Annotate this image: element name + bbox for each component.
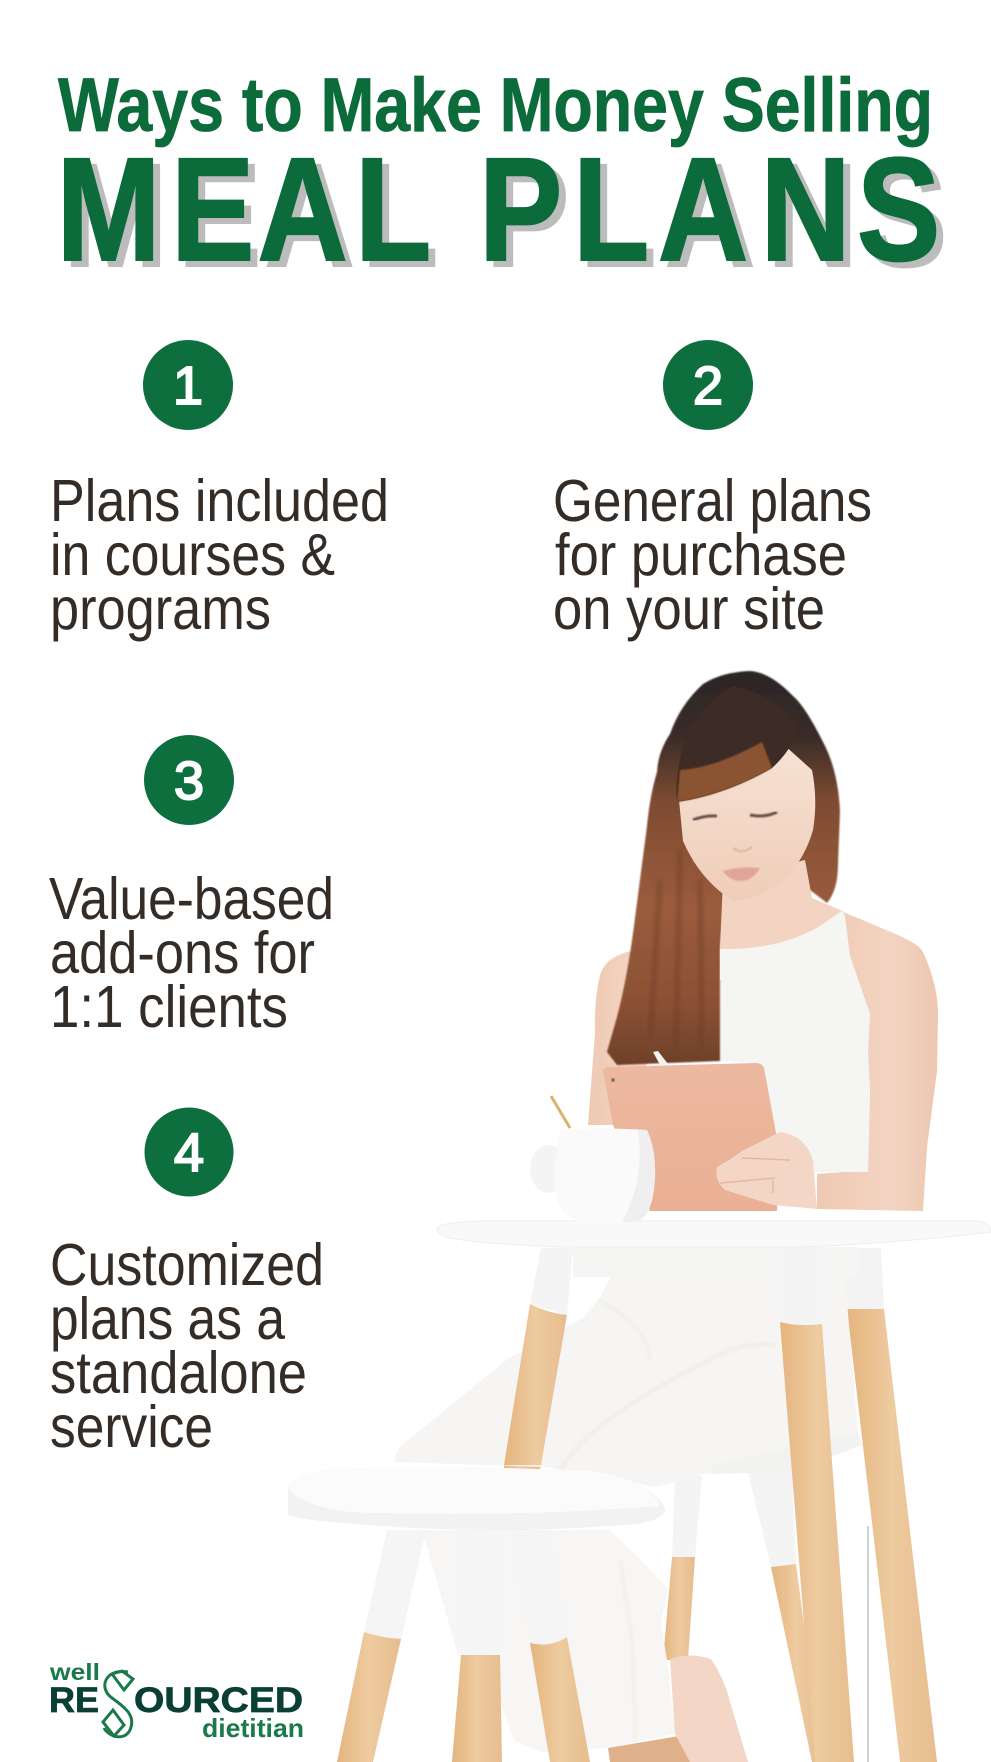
title line 2: meal plans: MEAL PLANS bbox=[57, 127, 940, 291]
trousers upper bbox=[394, 1277, 858, 1487]
text 1: in courses & bbox=[50, 522, 335, 588]
hand bbox=[716, 1132, 817, 1209]
logo: well resourced dietitian: OURCED bbox=[134, 1681, 303, 1720]
badge 3: 3 bbox=[174, 751, 204, 811]
dress bbox=[720, 910, 870, 1172]
badge 2 bbox=[663, 340, 753, 430]
logo: well resourced dietitian bbox=[49, 1659, 304, 1743]
woman upper body bbox=[588, 671, 938, 1211]
text 4: standalone bbox=[50, 1340, 307, 1406]
text 1: programs bbox=[50, 576, 271, 642]
foot bbox=[670, 1656, 748, 1762]
text 2 bbox=[553, 468, 872, 642]
centre table leg bbox=[778, 1249, 854, 1762]
text 3 bbox=[49, 866, 334, 1040]
chair seat bbox=[711, 1433, 862, 1474]
badge 1: 1 bbox=[173, 356, 203, 416]
logo: well resourced dietitian: well bbox=[49, 1659, 100, 1685]
icon: money S bbox=[103, 1671, 133, 1737]
table apron bbox=[573, 1247, 858, 1277]
step 4 bbox=[50, 1108, 324, 1460]
stylus bbox=[653, 1051, 668, 1065]
neck and chest bbox=[720, 860, 845, 950]
hair bbox=[607, 671, 840, 1065]
step 2 bbox=[553, 340, 872, 642]
step 3 bbox=[49, 735, 334, 1040]
face bbox=[676, 686, 815, 901]
thin vertical line bbox=[867, 1526, 869, 1762]
step 1 bbox=[50, 340, 389, 642]
rear table leg bbox=[842, 1248, 937, 1762]
text 4: Customized bbox=[50, 1232, 324, 1298]
badge 1 bbox=[143, 340, 233, 430]
text 2: General plans bbox=[553, 468, 872, 534]
badge 3 bbox=[144, 735, 234, 825]
text 2: for purchase bbox=[555, 522, 847, 588]
bangs bbox=[676, 686, 800, 802]
fingers and ring bbox=[720, 1158, 790, 1193]
stool seat bbox=[288, 1467, 665, 1530]
foot far bbox=[608, 1736, 690, 1762]
text 3: add-ons for bbox=[50, 920, 315, 986]
stool legs bbox=[337, 1530, 590, 1762]
text 4: service bbox=[50, 1394, 213, 1460]
photo: woman with tablet at table bbox=[288, 671, 991, 1762]
left table leg in front of thigh bbox=[504, 1304, 567, 1465]
cup with straw bbox=[530, 1096, 655, 1222]
logo: well resourced dietitian: RE bbox=[49, 1681, 99, 1720]
dress strap overlay bbox=[720, 910, 845, 980]
nose shadow bbox=[733, 847, 752, 851]
left arm bbox=[588, 950, 660, 1125]
logo: well resourced dietitian: dietitian bbox=[202, 1713, 304, 1743]
text 3: 1:1 clients bbox=[50, 974, 288, 1040]
text 1: Plans included bbox=[50, 468, 389, 534]
title line 2: meal plans: MEAL PLANS bbox=[64, 133, 947, 297]
text 1 bbox=[50, 468, 389, 642]
table top bbox=[437, 1221, 991, 1247]
left table leg lower bbox=[498, 1248, 573, 1660]
text 4: plans as a bbox=[50, 1286, 285, 1352]
badge 4 bbox=[144, 1108, 234, 1196]
badge 4: 4 bbox=[174, 1123, 204, 1183]
right arm bbox=[817, 912, 938, 1211]
tablet bbox=[603, 1063, 778, 1211]
text 4 bbox=[50, 1232, 324, 1460]
badge 2: 2 bbox=[693, 356, 723, 416]
chair legs bbox=[663, 1472, 822, 1762]
title bbox=[57, 63, 947, 297]
text 2: on your site bbox=[553, 576, 825, 642]
text 3: Value-based bbox=[49, 866, 334, 932]
trousers lower bbox=[422, 1530, 675, 1752]
lips bbox=[723, 867, 760, 881]
eyes bbox=[693, 812, 777, 820]
